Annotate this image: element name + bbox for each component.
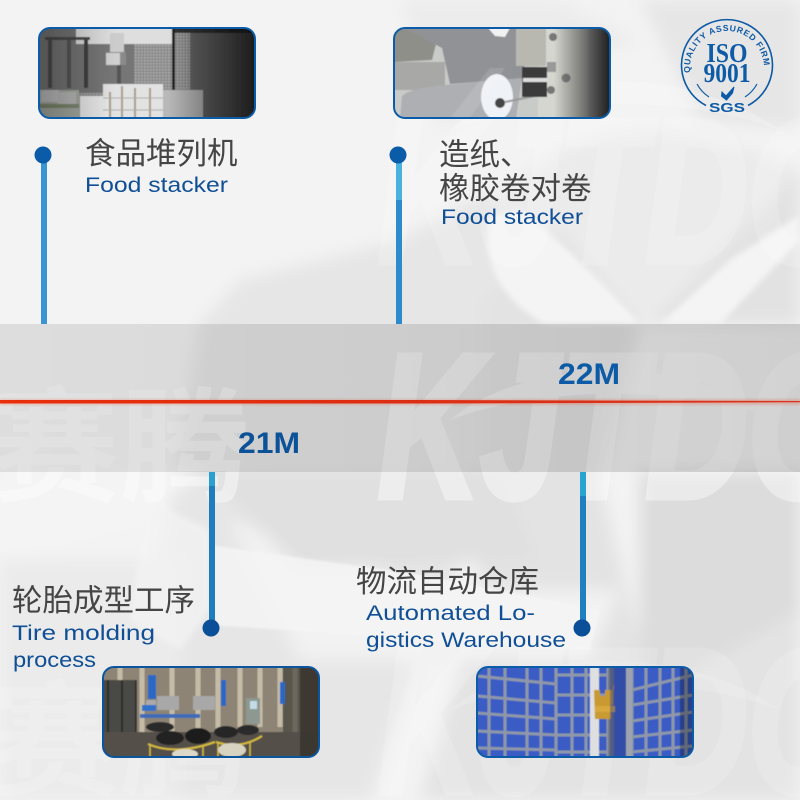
- caption: tire molding process: 轮胎成型工序: [12, 584, 195, 618]
- photo: food stacker: [39, 28, 255, 118]
- badge: ISO 9001 SGS: QUALITY ASSURED FIRM: [684, 24, 770, 72]
- caption: paper and rubber roll-to-roll: 造纸、: [439, 138, 530, 172]
- connector: paper and rubber: [390, 146, 406, 324]
- photo: tire molding machines: [103, 667, 319, 759]
- photo: paper rolls: [394, 28, 610, 120]
- timeline band: [0, 324, 800, 472]
- badge: ISO 9001 SGS: ISO: [706, 38, 748, 68]
- caption: automated logistics warehouse: [356, 565, 566, 652]
- connector: tire molding: [202, 472, 220, 636]
- badge: ISO 9001 SGS: SGS: [709, 100, 745, 115]
- watermark: Chinese brand text: [0, 380, 250, 800]
- caption: paper and rubber roll-to-roll: 橡胶卷对卷: [439, 172, 592, 206]
- caption: food stacker: [85, 137, 238, 197]
- connector: logistics warehouse: [574, 472, 590, 636]
- caption: food stacker: 食品堆列机: [85, 137, 238, 171]
- badge: ISO 9001 SGS: [680, 18, 774, 115]
- caption: automated logistics warehouse: gistics Warehouse: [366, 629, 566, 652]
- caption: paper and rubber roll-to-roll: Food stacker: [441, 206, 583, 229]
- connector: food stacker: [34, 146, 52, 324]
- caption: tire molding process: [12, 584, 195, 672]
- caption: food stacker: Food stacker: [85, 174, 228, 197]
- caption: tire molding process: Tire molding: [12, 622, 155, 645]
- milestone label: 21M: 21M: [238, 427, 300, 460]
- badge: ISO 9001 SGS: 9001: [704, 58, 750, 88]
- caption: paper and rubber roll-to-roll: [439, 138, 592, 229]
- milestone label: 22M: 22M: [558, 358, 620, 391]
- caption: automated logistics warehouse: 物流自动仓库: [356, 565, 539, 599]
- caption: tire molding process: process: [13, 649, 96, 672]
- photo: automated warehouse racks: [477, 667, 693, 757]
- watermark: KJTDG logo text: [378, 77, 800, 800]
- red timeline axis: [0, 399, 800, 405]
- caption: automated logistics warehouse: Automated Lo-: [366, 602, 535, 625]
